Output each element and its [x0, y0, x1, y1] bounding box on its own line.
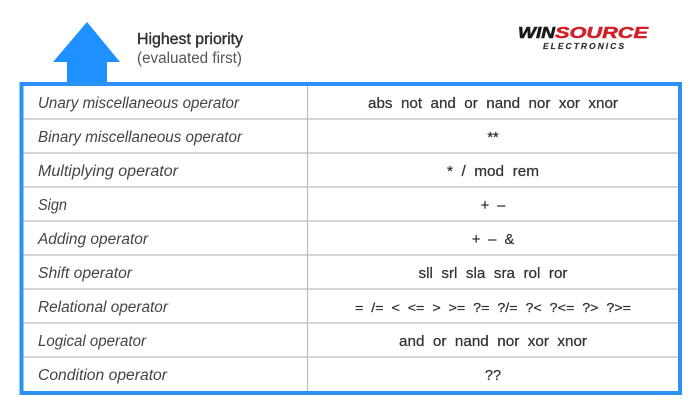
- icon: priority up arrow: [53, 22, 120, 84]
- row: condition operator: ??: [485, 368, 501, 384]
- heading: highest priority: Highest priority: [137, 31, 243, 48]
- row: multiplying operator: [38, 163, 539, 180]
- row: sign: [38, 197, 506, 214]
- table frame: [22, 84, 680, 393]
- heading: highest priority: [137, 31, 243, 67]
- row: adding operator: [37, 231, 514, 248]
- row: logical operator: Logical operator: [38, 333, 147, 350]
- row: shift operator: Shift operator: [38, 265, 133, 282]
- row: relational operator: Relational operator: [38, 299, 169, 316]
- heading: highest priority: (evaluated first): [137, 50, 242, 67]
- priority table: [22, 84, 680, 393]
- row dividers: [22, 85, 679, 392]
- row: binary miscellaneous operator: **: [487, 130, 499, 146]
- row: unary miscellaneous operator: abs not and or nand nor xor xnor: [368, 96, 618, 112]
- row: sign: + –: [481, 198, 506, 214]
- logo: WinSource Electronics: SOURCE: [555, 25, 650, 42]
- logo: WinSource Electronics: ELECTRONICS: [543, 41, 624, 51]
- row: shift operator: sll srl sla sra rol ror: [418, 266, 568, 282]
- logo: WinSource Electronics: [518, 25, 650, 51]
- row: binary miscellaneous operator: [38, 129, 499, 146]
- row: condition operator: [38, 367, 501, 384]
- row: relational operator: [38, 299, 631, 316]
- row: logical operator: and or nand nor xor xnor: [399, 334, 587, 350]
- row: multiplying operator: * / mod rem: [447, 164, 539, 180]
- row: adding operator: + – &: [472, 232, 514, 248]
- row: shift operator: [38, 265, 568, 282]
- row: unary miscellaneous operator: Unary miscellaneous operator: [38, 95, 240, 112]
- row: logical operator: [38, 333, 587, 350]
- row: adding operator: Adding operator: [37, 231, 149, 248]
- row: condition operator: Condition operator: [38, 367, 168, 384]
- row: relational operator: = /= < <= > >= ?= ?/= ?< ?<= ?> ?>=: [355, 300, 631, 315]
- logo: WinSource Electronics: WIN: [518, 25, 556, 42]
- row: multiplying operator: Multiplying operator: [38, 163, 179, 180]
- row: binary miscellaneous operator: Binary miscellaneous operator: [38, 129, 243, 146]
- row: unary miscellaneous operator: [38, 95, 618, 112]
- row: sign: Sign: [38, 197, 67, 214]
